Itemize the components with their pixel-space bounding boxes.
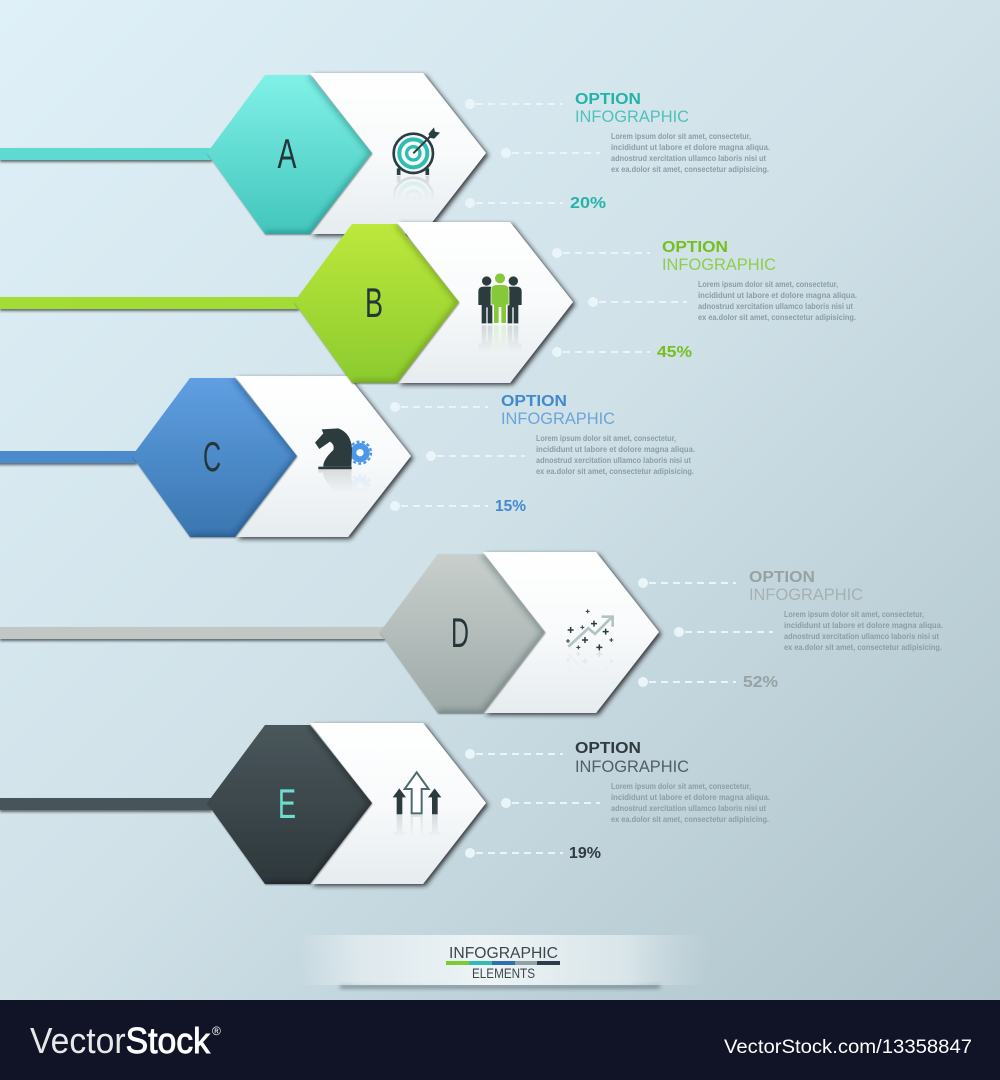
text block D: ex ea.dolor sit amet, consectetur adipisicing. [784, 643, 942, 652]
text block E: OPTION [575, 740, 641, 757]
percentage E: 19% [569, 845, 601, 862]
text block D: incididunt ut labore et dolore magna aliqua. [784, 621, 943, 630]
text block B: INFOGRAPHIC [662, 255, 776, 274]
letter B: B [365, 279, 383, 326]
text block C: adnostrud xercitation ullamco laboris nisi ut [536, 456, 691, 465]
text block D: OPTION [749, 569, 815, 586]
text block A: INFOGRAPHIC [575, 107, 689, 126]
letter D: D [451, 609, 469, 656]
text block E: adnostrud xercitation ullamco laboris nisi ut [611, 804, 766, 813]
percentage C: 15% [495, 498, 526, 515]
text block E: Lorem ipsum dolor sit amet, consectetur, [611, 782, 751, 791]
connector line E [0, 798, 212, 810]
text block B [662, 239, 857, 322]
text block A: ex ea.dolor sit amet, consectetur adipisicing. [611, 165, 769, 174]
option D [0, 552, 943, 713]
option C [0, 376, 695, 537]
text block B: incididunt ut labore et dolore magna aliqua. [698, 291, 857, 300]
letter C: C [203, 433, 221, 480]
text block E: ex ea.dolor sit amet, consectetur adipisicing. [611, 815, 769, 824]
text block B: ex ea.dolor sit amet, consectetur adipisicing. [698, 313, 856, 322]
colour bar [446, 961, 560, 965]
hexagon E [207, 725, 372, 884]
text block C: Lorem ipsum dolor sit amet, consectetur, [536, 434, 676, 443]
text block A: Lorem ipsum dolor sit amet, consectetur, [611, 132, 751, 141]
icon: chess knight and gear [315, 428, 372, 486]
text block E [575, 740, 770, 824]
footer logo: VectorStock [30, 1020, 211, 1061]
text block B: Lorem ipsum dolor sit amet, consectetur, [698, 280, 838, 289]
text block A: adnostrud xercitation ullamco laboris nisi ut [611, 154, 766, 163]
icon: people [478, 273, 522, 346]
text block B: adnostrud xercitation ullamco laboris nisi ut [698, 302, 853, 311]
callout dashes E [465, 749, 600, 858]
option A [0, 73, 770, 234]
bottom title banner [300, 935, 710, 988]
connector line C [0, 451, 137, 463]
text block A: OPTION [575, 91, 641, 108]
text block D [749, 569, 943, 652]
letter E: E [278, 780, 296, 827]
footer url: VectorStock.com/13358847 [724, 1037, 972, 1058]
hexagon A [207, 75, 372, 234]
text block E: INFOGRAPHIC [575, 757, 689, 776]
banner heading: INFOGRAPHIC [449, 945, 558, 962]
callout dashes C [390, 402, 525, 511]
text block C [501, 393, 695, 476]
percentage D: 52% [743, 674, 778, 691]
hexagon C [132, 378, 297, 537]
callout dashes B [552, 248, 687, 357]
hexagon B [294, 224, 459, 383]
icon: target [392, 127, 440, 195]
callout dashes A [465, 99, 600, 208]
registered mark: ® [212, 1024, 221, 1038]
text block C: incididunt ut labore et dolore magna aliqua. [536, 445, 695, 454]
connector line D [0, 627, 385, 639]
icon: growth arrow with stars [566, 609, 614, 664]
text block D: INFOGRAPHIC [749, 585, 863, 604]
white arrow panel E [310, 723, 486, 884]
callout dashes D [638, 578, 773, 687]
icon: up arrows [392, 770, 442, 832]
text block C: ex ea.dolor sit amet, consectetur adipisicing. [536, 467, 694, 476]
letter A: A [278, 130, 296, 177]
percentage B: 45% [657, 344, 692, 361]
text block A [575, 91, 770, 174]
option B [0, 222, 857, 383]
hexagon D [380, 554, 545, 713]
white arrow panel C [235, 376, 411, 537]
white arrow panel B [397, 222, 573, 383]
text block C: OPTION [501, 393, 567, 410]
text block D: Lorem ipsum dolor sit amet, consectetur, [784, 610, 924, 619]
white arrow panel D [483, 552, 659, 713]
banner subheading: ELEMENTS [472, 966, 535, 981]
white arrow panel A [310, 73, 486, 234]
footer bar [0, 1000, 1000, 1080]
text block B: OPTION [662, 239, 728, 256]
connector line A [0, 148, 212, 160]
text block A: incididunt ut labore et dolore magna aliqua. [611, 143, 770, 152]
text block D: adnostrud xercitation ullamco laboris nisi ut [784, 632, 939, 641]
connector line B [0, 297, 299, 309]
option E [0, 723, 770, 884]
percentage A: 20% [570, 195, 606, 212]
text block C: INFOGRAPHIC [501, 409, 615, 428]
text block E: incididunt ut labore et dolore magna aliqua. [611, 793, 770, 802]
